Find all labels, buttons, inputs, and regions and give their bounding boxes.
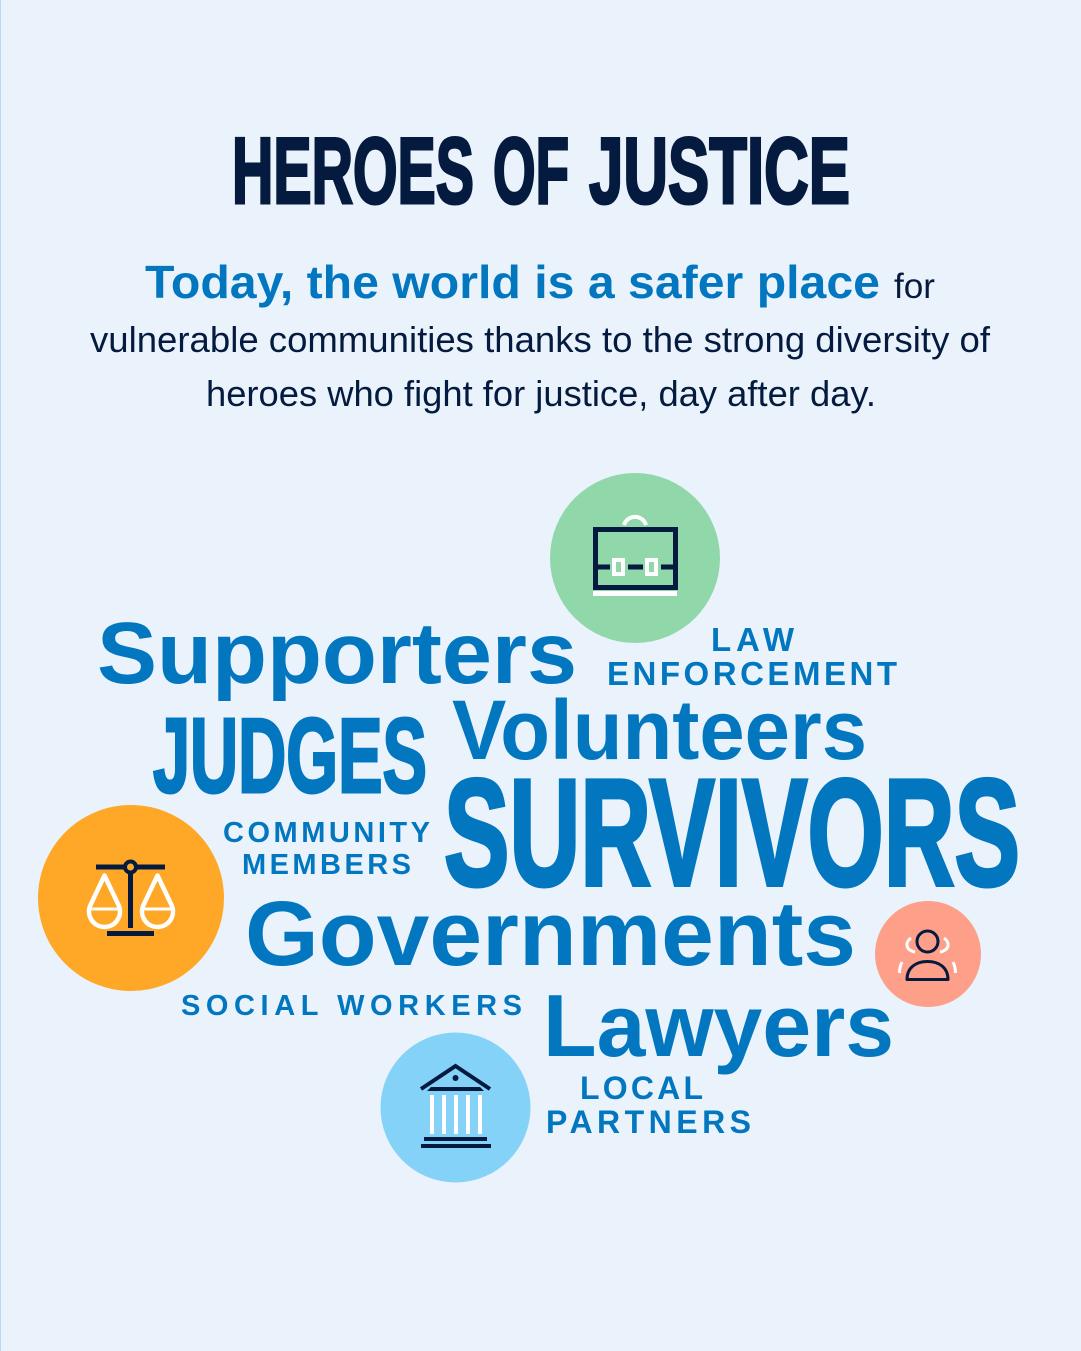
icon: person bbox=[875, 901, 981, 1007]
word: Community Members bbox=[223, 817, 430, 881]
intro text: for bbox=[894, 267, 935, 306]
word: Governments: Governments bbox=[245, 883, 856, 985]
title: OF bbox=[493, 118, 569, 223]
word: Lawyers: Lawyers bbox=[543, 976, 894, 1075]
word: Social Workers: SOCIAL WORKERS bbox=[181, 990, 522, 1022]
word: Community Members: MEMBERS bbox=[242, 849, 411, 881]
word: Local Partners: PARTNERS bbox=[546, 1104, 751, 1140]
title: JUSTICE bbox=[589, 118, 850, 223]
icon: briefcase bbox=[550, 473, 720, 643]
word: Local Partners bbox=[546, 1070, 751, 1140]
intro text: heroes who fight for justice, day after day. bbox=[206, 373, 876, 414]
word: Judges: JUDGES bbox=[153, 697, 427, 815]
word: Law Enforcement: LAW bbox=[711, 621, 795, 658]
title: HEROES bbox=[232, 118, 474, 223]
icon: scales of justice bbox=[38, 805, 224, 991]
word: Law Enforcement bbox=[607, 621, 897, 692]
word: Community Members: COMMUNITY bbox=[223, 817, 430, 849]
intro text: vulnerable communities thanks to the strong diversity of bbox=[90, 319, 991, 360]
word cloud bbox=[97, 605, 1020, 1140]
title bbox=[232, 118, 850, 223]
word: Volunteers: Volunteers bbox=[452, 683, 867, 777]
word: Local Partners: LOCAL bbox=[580, 1070, 703, 1106]
word: Supporters: Supporters bbox=[97, 605, 577, 702]
icon: courthouse bbox=[380, 1032, 530, 1182]
intro text: Today, the world is a safer place bbox=[145, 256, 880, 308]
intro text bbox=[90, 256, 991, 414]
word: Law Enforcement: ENFORCEMENT bbox=[607, 655, 897, 692]
